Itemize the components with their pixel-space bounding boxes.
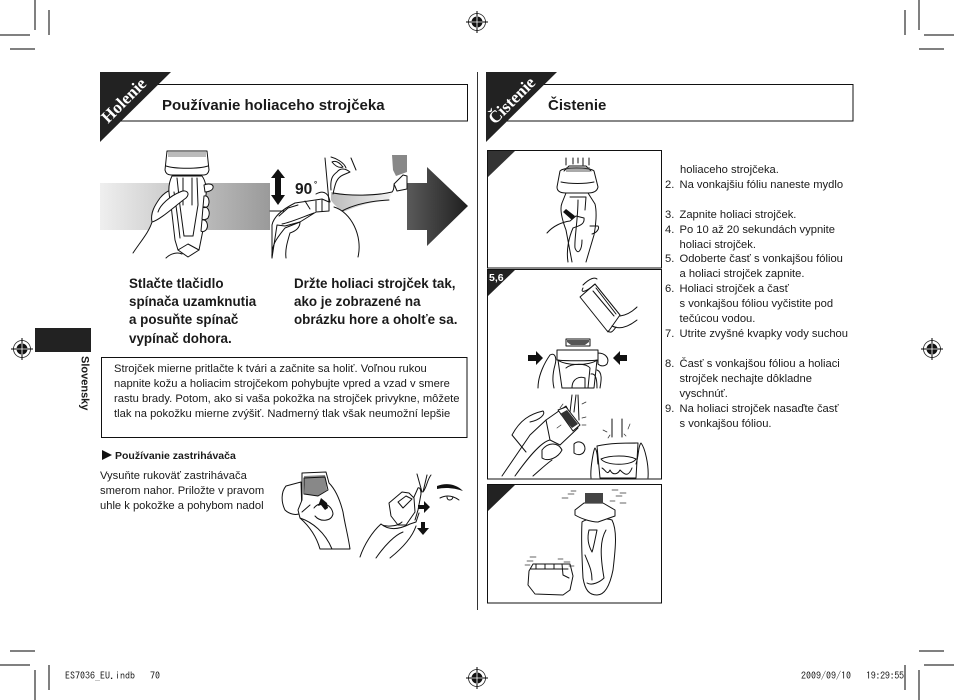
heading: Čistenie	[484, 72, 853, 142]
cleaning steps text: s vonkajšou fóliou.	[680, 418, 772, 430]
cleaning steps text: Odoberte časť s vonkajšou fóliou	[680, 253, 843, 265]
cleaning steps text: holiaceho strojčeka.	[680, 164, 779, 176]
cleaning steps text: 5.	[665, 253, 674, 265]
trimmer text: uhle k pokožke a pohybom nadol	[100, 500, 264, 512]
step text: right: ako je zobrazené na	[294, 294, 421, 309]
shaving tip box: napnite kožu a holiacim strojčekom pohybujte vpred a vzad v smere	[114, 378, 450, 390]
footer: file name and page: ES7036_EU.indb	[65, 671, 135, 681]
registration mark: left	[11, 338, 33, 360]
footer: date and time: 19:29:55	[866, 671, 904, 681]
trimmer text: Vysuňte rukoväť zastrihávača	[100, 470, 248, 482]
heading: Používanie holiaceho strojčeka: Používanie holiaceho strojčeka	[162, 97, 385, 114]
illustration: trimming sideburns	[360, 474, 431, 558]
centre divider	[476, 72, 478, 610]
icon: 90 degree angle arrow: 90	[295, 181, 312, 198]
illustration: hand switching on shaver	[133, 151, 213, 258]
cleaning steps text: Utrite zvyšné kvapky vody suchou	[680, 328, 848, 340]
cleaning steps text: s vonkajšou fóliou vyčistite pod	[680, 298, 833, 310]
registration mark: bottom	[466, 667, 488, 689]
trimmer heading: Používanie zastrihávača	[115, 450, 236, 462]
registration mark: right	[921, 338, 943, 360]
shaving tip box: Strojček mierne pritlačte k tvári a začnite sa holiť. Voľnou rukou	[114, 363, 427, 375]
trimmer text: smerom nahor. Priložte v pravom	[100, 485, 264, 497]
gradient band	[100, 183, 270, 230]
icon: 90 degree angle arrow	[271, 169, 317, 205]
cleaning steps text: vyschnúť.	[680, 388, 728, 400]
cleaning steps text: Po 10 až 20 sekundách vypnite	[680, 224, 835, 236]
step text: left: a posuňte spínač	[129, 312, 239, 327]
cleaning steps text: 6.	[665, 283, 674, 295]
step text: right: obrázku hore a oholťe sa.	[294, 312, 457, 327]
heading: Používanie holiaceho strojčeka: Holenie	[97, 74, 151, 127]
shaving tip box: tlak na pokožku mierne zvýšiť. Nadmerný tlak však neumožní lepšie	[114, 408, 450, 420]
cleaning steps text: Na holiaci strojček nasaďte časť	[680, 403, 839, 415]
cleaning steps text: tečúcou vodou.	[680, 313, 755, 325]
illustration: shaving the neck	[270, 155, 407, 258]
cleaning steps text: 4.	[665, 224, 674, 236]
icon: 90 degree angle arrow: °	[314, 180, 317, 189]
cleaning steps text: 8.	[665, 358, 674, 370]
heading: Používanie holiaceho strojčeka	[97, 72, 467, 142]
cleaning steps text: 2.	[665, 179, 674, 191]
cleaning steps text: Zapnite holiaci strojček.	[680, 209, 796, 221]
icon: eye and eyebrow	[437, 484, 463, 500]
step text: left: vypínač dohora.	[129, 331, 232, 346]
cleaning steps text: Holiaci strojček a časť	[680, 283, 790, 295]
language side tab	[35, 328, 91, 411]
shaving tip box	[102, 358, 467, 438]
step text: left: Stlačte tlačidlo	[129, 276, 224, 291]
step text: right: Držte holiaci strojček tak,	[294, 276, 456, 291]
cleaning steps text: Na vonkajšiu fóliu naneste mydlo	[680, 179, 843, 191]
cleaning steps text: holiaci strojček.	[680, 239, 756, 251]
shaving tip box: rastu brady. Potom, ako si vaša pokožka na strojček privykne, môžete	[114, 393, 460, 405]
footer: file name and page: 70	[150, 671, 160, 681]
panel: step 8 drying	[488, 484, 662, 603]
heading: Čistenie: Čistenie	[484, 73, 540, 128]
cleaning steps text: 3.	[665, 209, 674, 221]
panel: steps 5,6 rinse: 5,6	[489, 272, 504, 284]
cleaning steps text: 9.	[665, 403, 674, 415]
panel: step 1 apply soap	[488, 150, 662, 268]
panel: steps 5,6 rinse	[488, 270, 662, 479]
heading: Čistenie: Čistenie	[548, 96, 606, 114]
footer: date and time: 2009/09/10	[801, 669, 851, 681]
cleaning steps text: 7.	[665, 328, 674, 340]
cleaning steps text: Časť s vonkajšou fóliou a holiaci	[680, 357, 840, 370]
illustration: trimmer handle	[282, 472, 350, 549]
registration mark: top	[466, 11, 488, 33]
large step arrow	[407, 167, 468, 246]
cleaning steps text: strojček nechajte dôkladne	[680, 373, 812, 385]
step text: left: spínača uzamknutia	[129, 294, 257, 309]
footer: date and time	[801, 669, 904, 681]
language side tab: Slovensky	[78, 356, 90, 411]
cleaning steps text: a holiaci strojček zapnite.	[680, 268, 804, 280]
